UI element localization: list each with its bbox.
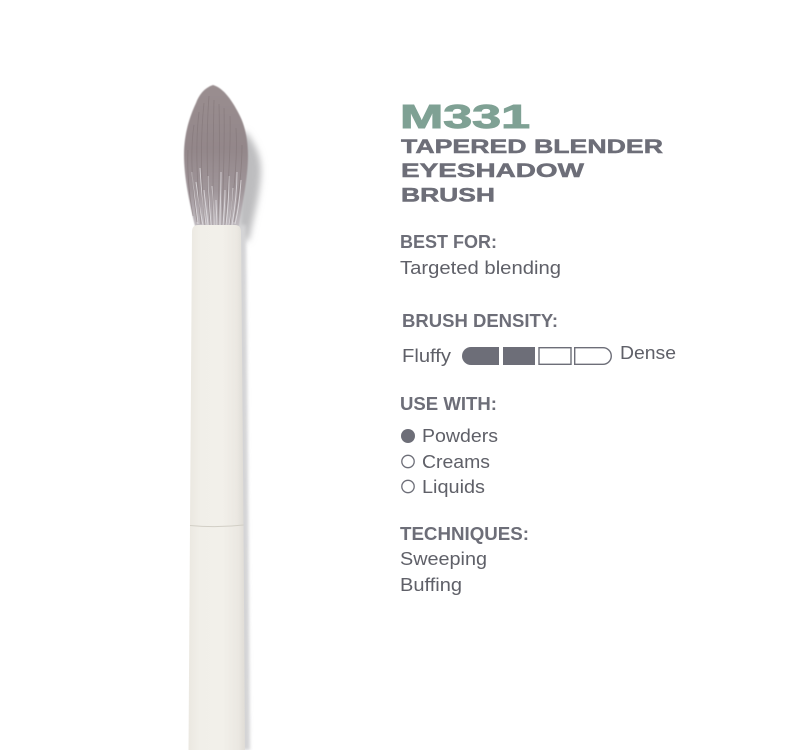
techniques section: TECHNIQUES: [400,523,529,544]
density scale right label: Dense [620,342,676,363]
option: liquids: Liquids [422,476,485,497]
brush handle [188,225,245,750]
techniques section: Sweeping [400,548,487,569]
product name: EYESHADOW [401,160,585,182]
option: powders: Powders [422,425,498,446]
use with section [400,393,498,497]
best for section: BEST FOR: [400,231,497,252]
use with heading: USE WITH: [400,393,497,414]
brush illustration [184,85,261,750]
best for section: Targeted blending [400,257,561,278]
techniques section: Buffing [400,574,462,595]
density meter [462,347,611,365]
techniques section [400,523,529,595]
product title [400,98,663,206]
density scale left label: Fluffy [402,345,452,366]
product name: TAPERED BLENDER [401,136,663,158]
brush density section [402,310,676,366]
product code: M331 [400,98,530,135]
density heading: BRUSH DENSITY: [402,310,558,331]
option: creams: Creams [422,451,490,472]
product name [401,136,663,206]
brush hair [184,85,248,226]
brush shadow [238,132,261,750]
product name: BRUSH [401,184,495,206]
best for section [400,231,561,278]
